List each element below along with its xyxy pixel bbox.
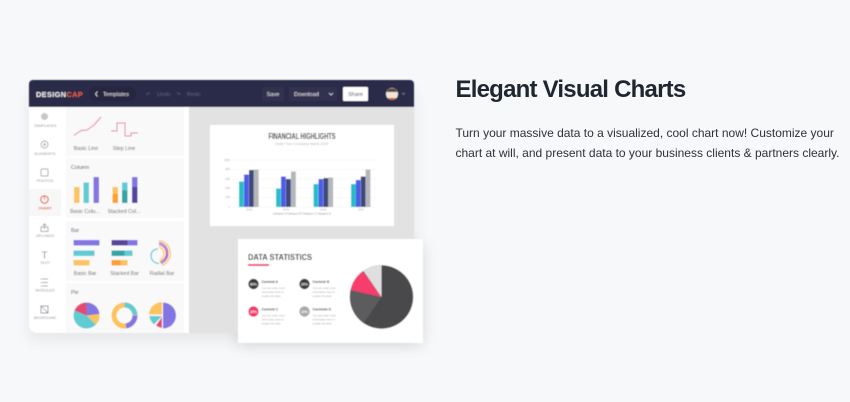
nav: photos	[37, 169, 54, 183]
content D: Contents D	[312, 308, 332, 312]
content A: explain the data	[262, 294, 281, 298]
content A: 60%	[250, 282, 257, 286]
nav: templates	[34, 113, 57, 128]
content A: You can enter more	[262, 286, 285, 290]
pie section	[71, 290, 176, 328]
chart list panel	[61, 107, 189, 334]
nav: background	[34, 306, 56, 320]
column chart: 2018	[246, 208, 253, 212]
column chart: 400	[225, 186, 230, 190]
column chart: 2019	[283, 208, 290, 212]
content D: explain the data	[312, 322, 332, 326]
content C: You can enter more	[262, 314, 285, 318]
content B: 20%	[301, 282, 308, 286]
save button	[266, 91, 280, 97]
nav: text: TEXT	[40, 260, 51, 265]
bar section	[71, 228, 175, 277]
description text: Turn your massive data to a visualized, cool chart now! Customize your	[456, 126, 834, 140]
content B: You can enter more	[312, 286, 336, 290]
content C: Content C	[262, 308, 279, 312]
content D: 10%	[301, 310, 308, 314]
column section: Column	[71, 165, 89, 171]
download button: Download	[294, 92, 319, 98]
column chart: 800	[225, 167, 230, 171]
column chart: 2021	[358, 208, 365, 212]
nav: elements	[35, 141, 56, 156]
content C: 10%	[250, 310, 257, 314]
pie section: Pie	[71, 290, 79, 296]
pie chart one	[74, 302, 100, 328]
bar section: Bar	[71, 228, 79, 234]
heading: Elegant Visual Charts	[456, 76, 685, 103]
content B	[299, 279, 336, 298]
column chart	[224, 158, 378, 216]
save button: Save	[267, 92, 279, 98]
content A	[248, 279, 285, 298]
content B: Content B	[312, 280, 330, 284]
nav: chart active: CHART	[38, 206, 52, 210]
content D: information here to	[312, 318, 335, 322]
nav: background: BKGROUND	[34, 315, 56, 320]
pie chart three	[149, 302, 176, 328]
slide title: FINANCIAL HIGHLIGHTS	[268, 131, 336, 141]
column chart: 0	[228, 205, 230, 209]
content C: explain the data	[262, 322, 281, 326]
column section	[70, 165, 140, 215]
bar section: Basic Bar	[74, 271, 97, 277]
nav: chart active	[38, 196, 52, 210]
data statistics card	[238, 239, 423, 343]
card title: DATA STATISTICS	[248, 253, 313, 262]
templates button: Templates	[103, 92, 129, 98]
financial highlights slide: Enter Your Company Name 2020	[276, 142, 328, 146]
share button: Share	[348, 92, 363, 98]
description text: chart at will, and present data to your business clients & partners clearly.	[456, 146, 839, 160]
content A: Content A	[262, 280, 279, 284]
undo and redo: Undo	[157, 92, 171, 98]
description text	[456, 126, 839, 160]
nav: elements: ELEMENTS	[35, 151, 56, 156]
column chart: 600	[225, 177, 230, 181]
nav: photos: PHOTOS	[37, 178, 54, 183]
user avatar	[386, 88, 405, 100]
donut chart	[114, 305, 135, 326]
financial highlights slide	[210, 125, 394, 226]
content C: information here to	[262, 318, 284, 322]
content B: explain the data	[312, 294, 332, 298]
nav: uploads	[36, 224, 55, 238]
column section: Basic Colu...	[70, 209, 100, 215]
product screenshot illustration	[28, 79, 428, 350]
bar section: Radial Bar	[150, 271, 175, 277]
column chart: 1000	[224, 158, 230, 162]
line charts	[74, 117, 138, 152]
content D: You can enter more	[312, 314, 336, 318]
line charts: Step Line	[113, 146, 135, 152]
content B: information here to	[312, 290, 335, 294]
nav: modules	[35, 278, 55, 292]
top toolbar	[29, 80, 414, 107]
content A: information here to	[262, 290, 284, 294]
radial bar	[151, 240, 170, 266]
bar section: Stacked Bar	[110, 271, 139, 277]
content D	[299, 306, 336, 326]
column chart: 2020	[320, 208, 327, 212]
logo: DESIGNCAP	[36, 90, 83, 99]
undo and redo	[146, 92, 200, 96]
nav: templates: TEMPLATES	[34, 123, 57, 128]
app window	[29, 80, 414, 334]
nav: text	[40, 251, 50, 264]
nav: text: T	[41, 250, 48, 262]
sidebar	[29, 107, 61, 334]
templates button	[89, 87, 136, 101]
undo and redo: Redo	[187, 92, 201, 98]
nav: modules: MODULES	[35, 288, 55, 292]
content C	[248, 306, 285, 326]
undo and redo: ↷	[176, 91, 181, 98]
nav: uploads: UPLOADS	[36, 233, 55, 238]
line charts: Basic Line	[74, 146, 98, 152]
share button	[343, 87, 368, 101]
column chart: 200	[225, 195, 230, 199]
download button	[293, 91, 334, 97]
column chart: Category A Category B Category C Category D	[273, 212, 331, 216]
pie chart	[350, 265, 413, 329]
undo and redo: ↶	[146, 91, 151, 98]
column section: Stacked Col...	[108, 209, 140, 215]
